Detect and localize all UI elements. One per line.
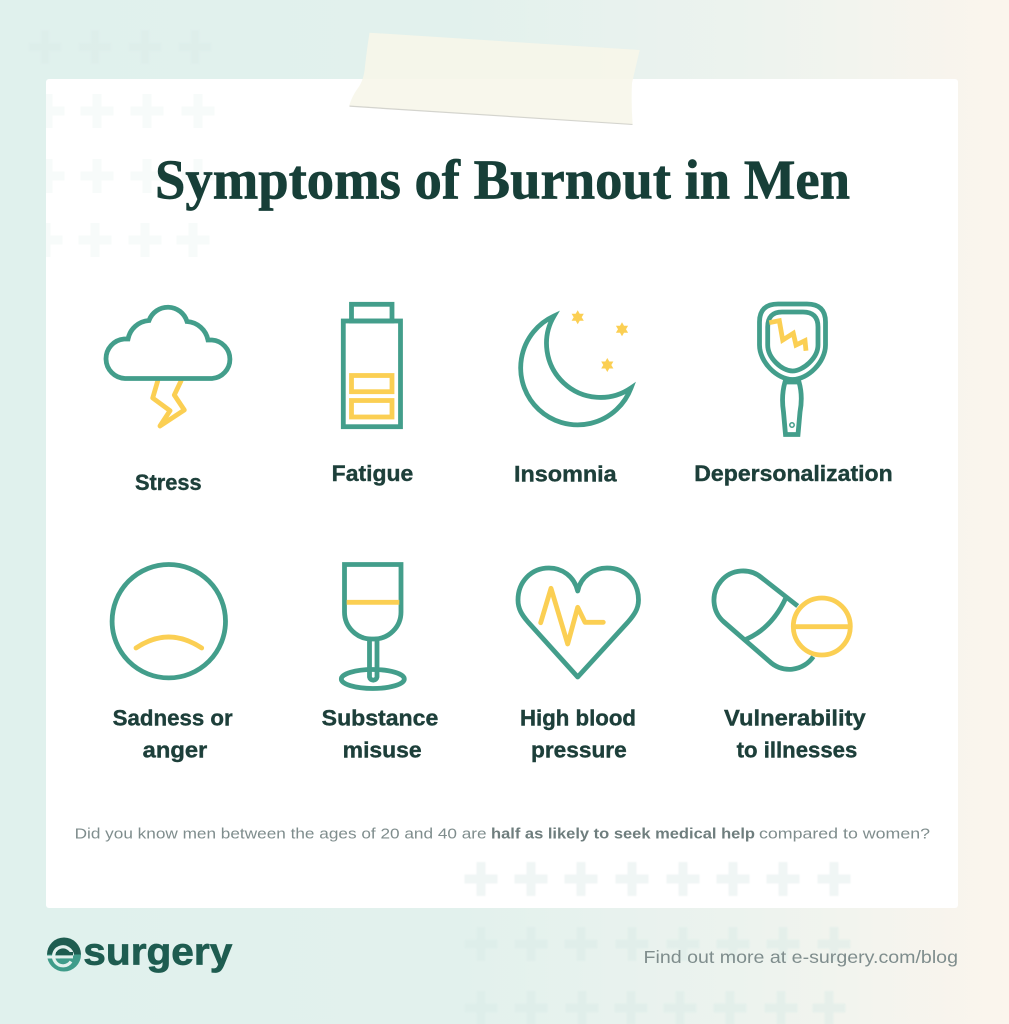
symptom: sadness or anger [112, 564, 233, 762]
fact text: Did you know men between the ages of 20 and 40 are [75, 826, 487, 842]
plus pattern: top left inside card [30, 94, 214, 257]
symptom: vulnerability to illnesses [714, 571, 867, 762]
symptom: depersonalization [694, 304, 893, 486]
icon: storm cloud [106, 307, 230, 426]
label line 2: misuse [343, 738, 422, 762]
logo icon [46, 938, 81, 972]
fact text [75, 826, 930, 842]
label: Fatigue [332, 461, 413, 486]
plus pattern: footer [464, 927, 850, 1024]
symptom: substance misuse [322, 564, 438, 762]
label line 2: pressure [531, 738, 627, 762]
plus pattern: top left outside card [28, 30, 212, 64]
label: Sadness or [113, 706, 233, 731]
fact text: compared to women? [759, 826, 930, 842]
icon: battery [343, 304, 400, 427]
fact text: half as likely to seek medical help [491, 826, 755, 842]
label line 2: anger [143, 738, 208, 762]
icon: moon and stars [521, 310, 631, 425]
label: Depersonalization [694, 461, 893, 486]
card [46, 79, 958, 908]
icon: heart with pulse [518, 568, 638, 677]
label: Stress [135, 470, 202, 495]
symptom: stress [106, 307, 230, 495]
symptom: fatigue [332, 304, 413, 486]
footer link text: Find out more at e-surgery.com/blog [644, 947, 958, 967]
symptom: insomnia [514, 310, 631, 486]
icon: wine glass [341, 564, 404, 688]
icon: pill capsule and tablet [714, 571, 850, 669]
logo wordmark: surgery [83, 931, 232, 973]
label: Insomnia [514, 462, 618, 486]
symptom: high blood pressure [518, 568, 638, 762]
logo [46, 931, 232, 973]
label line 2: to illnesses [737, 738, 857, 762]
label: Vulnerability [724, 706, 867, 731]
title: Symptoms of Burnout in Men [155, 150, 850, 212]
label: High blood [520, 706, 636, 731]
icon: cracked mirror [760, 304, 826, 434]
plus pattern: bottom right inside card [464, 862, 850, 896]
icon: sad face [112, 564, 226, 678]
tape [349, 33, 640, 125]
label: Substance [322, 706, 438, 731]
